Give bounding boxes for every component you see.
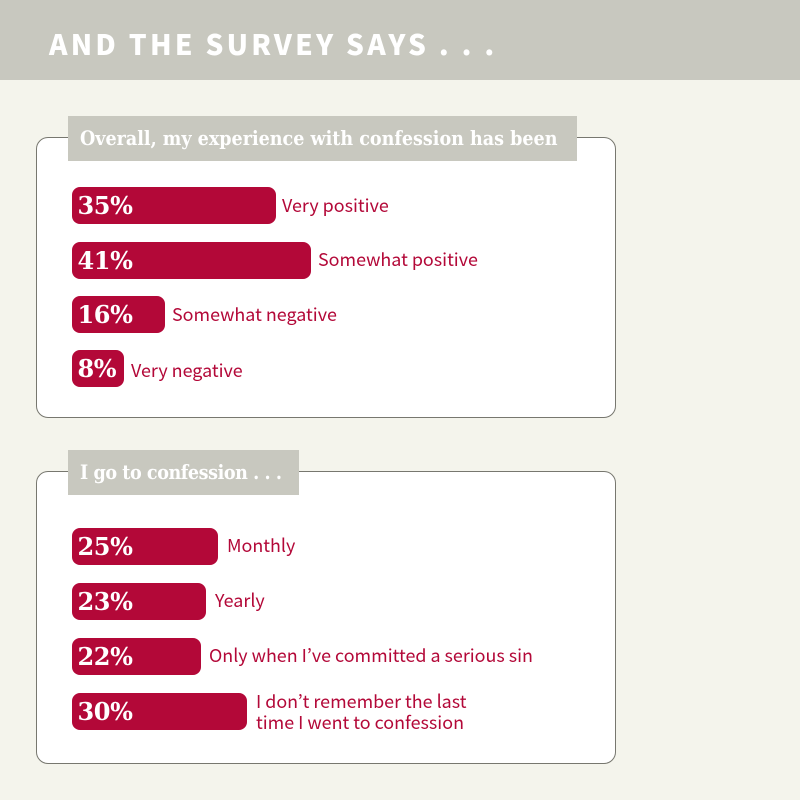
label: yearly: Yearly <box>215 587 265 613</box>
panel: confession frequency <box>36 450 616 764</box>
bar: 30% don't remember: 30% <box>78 697 133 726</box>
label: don't remember: I don’t remember the last <box>256 688 466 714</box>
label: don't remember: time I went to confession <box>256 709 464 735</box>
label: somewhat positive: Somewhat positive <box>318 246 478 272</box>
bar: 25% monthly <box>72 528 218 564</box>
label: only when serious sin: Only when I’ve committed a serious sin <box>209 642 533 668</box>
bar: 35% very positive <box>72 187 276 224</box>
bar: 22% serious sin <box>72 638 200 674</box>
bar: 23% yearly <box>72 583 206 620</box>
bar: 41% somewhat positive: 41% <box>78 246 133 275</box>
bar: 35% very positive: 35% <box>78 191 133 220</box>
panel: confession experience <box>36 116 616 418</box>
heading: experience: Overall, my experience with confession has been <box>80 127 557 150</box>
bar: 23% yearly: 23% <box>78 587 133 616</box>
bar: 16% somewhat negative: 16% <box>78 300 133 329</box>
label: don't remember <box>256 688 466 735</box>
panel card <box>36 137 616 418</box>
label: very positive: Very positive <box>282 192 389 218</box>
title: AND THE SURVEY SAYS . . . <box>49 24 498 64</box>
heading: experience <box>68 116 577 161</box>
bar: 8% very negative: 8% <box>78 354 116 383</box>
bar: 8% very negative <box>72 350 124 386</box>
bar: 41% somewhat positive <box>72 242 311 278</box>
header band <box>0 0 800 80</box>
bar: 22% serious sin: 22% <box>78 642 133 671</box>
bar: 25% monthly: 25% <box>78 532 133 561</box>
bar: 30% don't remember <box>72 693 247 730</box>
panel card <box>36 471 616 764</box>
label: monthly: Monthly <box>227 532 295 558</box>
heading: frequency <box>68 450 299 495</box>
bar: 16% somewhat negative <box>72 296 165 332</box>
heading: frequency: I go to confession . . . <box>80 461 282 484</box>
label: somewhat negative: Somewhat negative <box>172 301 337 327</box>
label: very negative: Very negative <box>131 357 243 383</box>
